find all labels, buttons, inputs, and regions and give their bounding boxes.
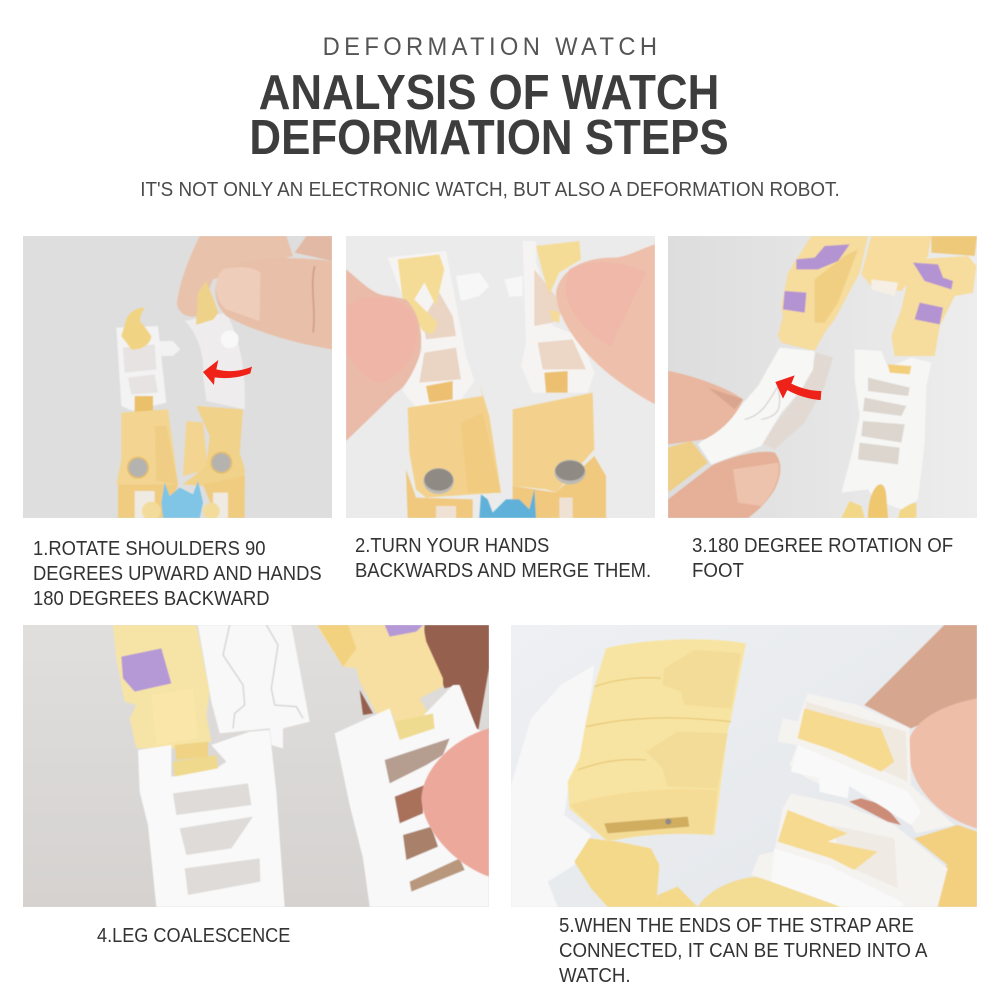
main title: ANALYSIS OF WATCH bbox=[259, 66, 719, 120]
eyebrow heading: DEFORMATION WATCH bbox=[323, 33, 661, 61]
right strap upper piece bbox=[778, 693, 954, 833]
left leg yellow section bbox=[113, 625, 211, 748]
hand bbox=[849, 625, 977, 828]
robot legs with purple panels bbox=[778, 236, 977, 356]
panel: step 1 photo bbox=[23, 236, 332, 518]
caption 3: 3.180 DEGREE ROTATION OF bbox=[692, 535, 953, 557]
panel: step 4 photo bbox=[23, 625, 489, 907]
right strap lower piece bbox=[751, 793, 977, 907]
caption 1: 1.ROTATE SHOULDERS 90 bbox=[33, 538, 265, 560]
caption 5 bbox=[559, 915, 928, 987]
panel: step 5 photo bbox=[511, 625, 977, 907]
caption 5: CONNECTED, IT CAN BE TURNED INTO A bbox=[559, 940, 927, 962]
caption 2 bbox=[355, 535, 651, 582]
caption 3: FOOT bbox=[692, 560, 744, 582]
left fingertip bbox=[346, 269, 421, 441]
caption 1: DEGREES UPWARD AND HANDS bbox=[33, 563, 322, 585]
hand holding the arm bbox=[177, 236, 332, 349]
caption 5: 5.WHEN THE ENDS OF THE STRAP ARE bbox=[559, 915, 914, 937]
panel: step 3 photo bbox=[668, 236, 977, 518]
subtitle: IT'S NOT ONLY AN ELECTRONIC WATCH, BUT ALSO A DEFORMATION ROBOT. bbox=[140, 178, 840, 201]
caption 1: 180 DEGREES BACKWARD bbox=[33, 588, 270, 610]
white leg section bbox=[841, 349, 931, 518]
caption 1 bbox=[33, 538, 322, 610]
finger behind the leg bbox=[360, 625, 489, 732]
yellow watch strap blocks bbox=[568, 639, 746, 842]
white foot panel bbox=[198, 625, 310, 748]
white ladder right bbox=[335, 685, 489, 907]
main title bbox=[249, 66, 729, 165]
caption 5: WATCH. bbox=[559, 965, 631, 987]
arrow: rotation bbox=[203, 360, 252, 385]
fingers holding strap bbox=[668, 371, 780, 518]
caption 2: BACKWARDS AND MERGE THEM. bbox=[355, 560, 651, 582]
fingertip bbox=[421, 728, 489, 877]
main title: DEFORMATION STEPS bbox=[249, 111, 729, 165]
toy robot in step 1 bbox=[116, 281, 245, 520]
panel: step 2 photo bbox=[346, 236, 655, 518]
right fingertip bbox=[556, 244, 655, 404]
white ladder left bbox=[138, 730, 285, 907]
lower yellow parts bbox=[574, 838, 848, 907]
caption 4: 4.LEG COALESCENCE bbox=[97, 925, 290, 947]
white strap left bbox=[511, 665, 594, 907]
caption 2: 2.TURN YOUR HANDS bbox=[355, 535, 549, 557]
caption 3 bbox=[692, 535, 953, 582]
toy robot in step 2 bbox=[388, 241, 606, 518]
right leg yellow section bbox=[316, 625, 443, 730]
curved white strap bbox=[698, 348, 833, 464]
arrow: rotation bbox=[775, 375, 821, 400]
